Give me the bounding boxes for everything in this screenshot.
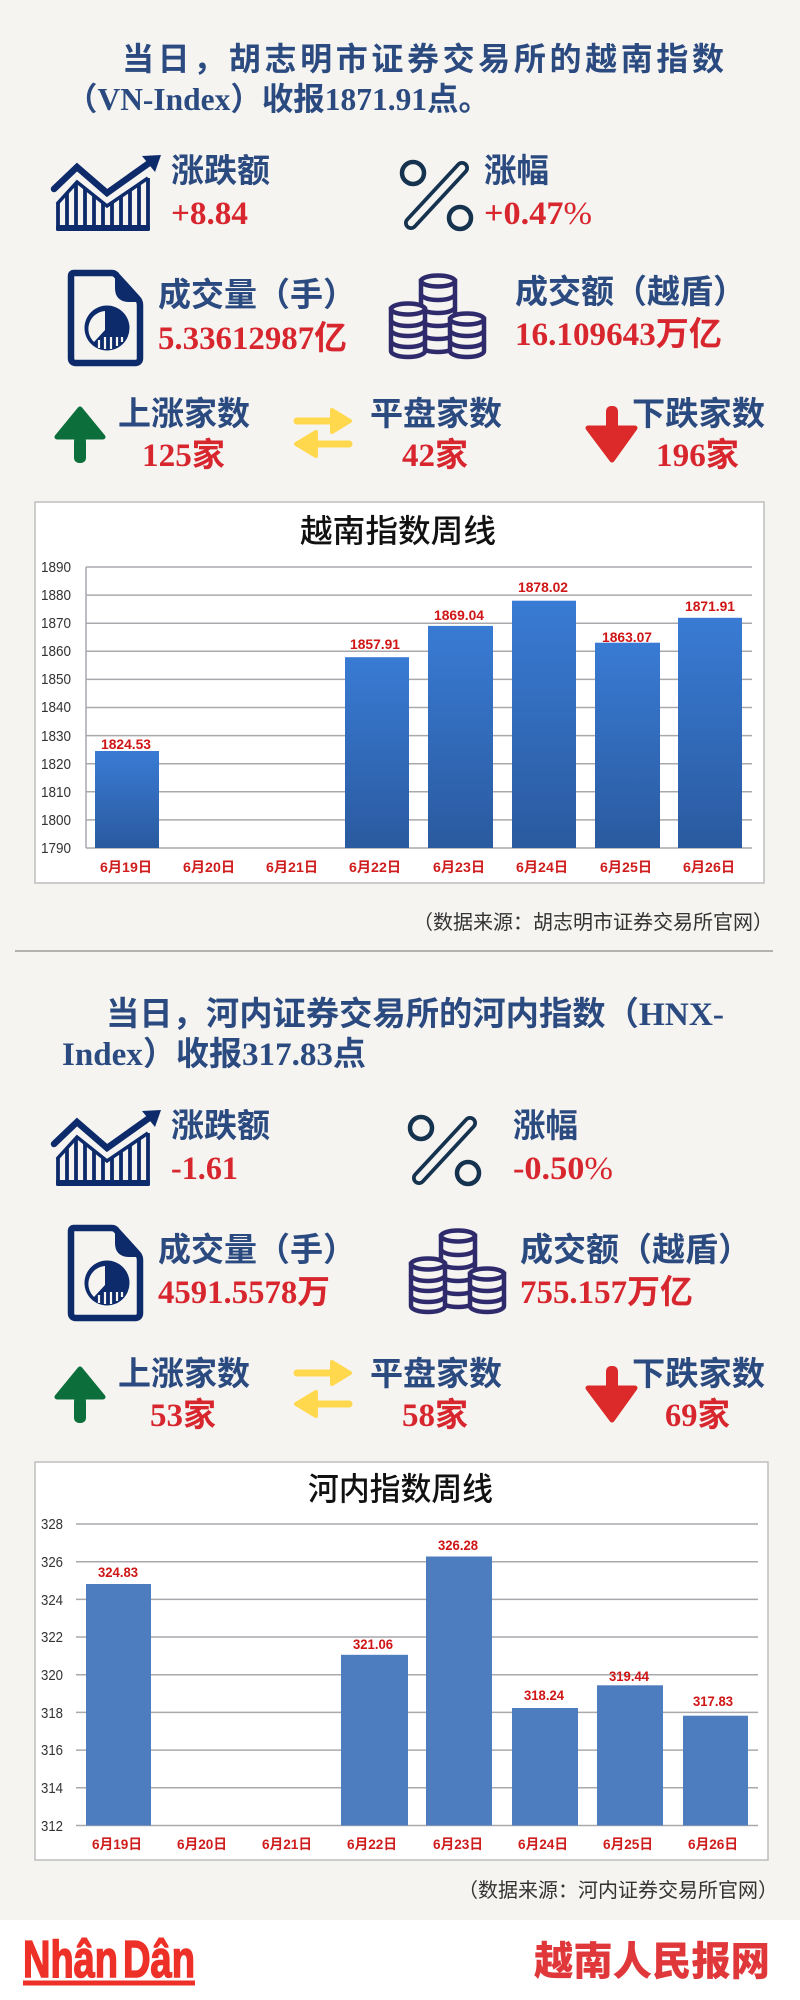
- metric: change percent: [484, 144, 592, 232]
- bar value labels: 318.24: [524, 1687, 564, 1703]
- heading: HNX-Index: [62, 996, 724, 1073]
- logo: Nhan Dan: Dân: [123, 1931, 195, 1989]
- metric: volume: 成交量（手）: [158, 1223, 356, 1271]
- date axis labels: [100, 859, 735, 875]
- date axis labels: 6月24日: [516, 859, 568, 875]
- panel: VN-Index summary: [54, 41, 765, 474]
- panel: HNX-Index weekly bar chart: [35, 1462, 768, 1860]
- metric: decliners: 196家: [656, 437, 739, 474]
- date axis labels: 6月22日: [347, 1836, 397, 1852]
- icon: unchanged arrows: [296, 410, 350, 456]
- metric: change percent: 涨幅: [484, 144, 549, 192]
- date axis labels: 6月25日: [603, 1836, 653, 1852]
- grid lines and axis labels: 1890: [41, 559, 71, 576]
- icon: down arrow: [588, 1366, 635, 1420]
- bar value labels: 324.83: [98, 1564, 138, 1580]
- footer: [0, 1920, 800, 2000]
- bar value labels: 1857.91: [350, 636, 400, 652]
- date axis labels: 6月26日: [688, 1836, 738, 1852]
- bar value labels: 1878.02: [518, 579, 568, 595]
- metric: unchanged: 平盘家数: [370, 1347, 502, 1395]
- grid lines and axis labels: 318: [41, 1705, 63, 1722]
- metric: gainers: [118, 387, 250, 474]
- icon: rising chart: [54, 155, 161, 231]
- bar value labels: 1863.07: [602, 629, 652, 645]
- date axis labels: 6月25日: [600, 859, 652, 875]
- metric: volume: [158, 268, 356, 357]
- bars: [86, 1556, 748, 1826]
- metric: volume: [158, 1223, 356, 1311]
- site name: 越南人民报网: [534, 1929, 770, 1987]
- grid lines and axis labels: [41, 1516, 758, 1835]
- bar value labels: [101, 579, 735, 752]
- metric: turnover: [520, 1223, 751, 1311]
- source note: HNX: （数据来源：河内证券交易所官网）: [458, 1874, 778, 1903]
- grid lines and axis labels: 312: [41, 1818, 63, 1835]
- icon: up arrow: [57, 1369, 103, 1423]
- metric: gainers: 125家: [142, 437, 225, 474]
- bars: [95, 601, 742, 848]
- metric: decliners: 69家: [665, 1397, 730, 1434]
- icon: rising chart: [54, 1110, 161, 1186]
- metric: turnover: 755.157万亿: [520, 1274, 693, 1311]
- icon: down arrow: [588, 406, 635, 460]
- metric: turnover: 16.109643万亿: [515, 316, 722, 353]
- icon: document with pie chart: [71, 272, 143, 363]
- date axis labels: 6月22日: [349, 859, 401, 875]
- chart title: 越南指数周线: [300, 506, 496, 552]
- icon: unchanged arrows: [296, 1362, 350, 1416]
- bar value labels: 321.06: [353, 1636, 393, 1652]
- metric: volume: 5.33612987亿: [158, 320, 347, 357]
- date axis labels: 6月23日: [433, 1836, 483, 1852]
- heading: HNX-Index: 当日，河内证券交易所的河内指数（HNX-: [106, 996, 724, 1033]
- grid lines and axis labels: 324: [41, 1592, 63, 1609]
- metric: volume: 成交量（手）: [158, 268, 356, 316]
- date axis labels: 6月21日: [262, 1836, 312, 1852]
- panel: VN-Index weekly bar chart: [35, 502, 764, 883]
- metric: decliners: [632, 1347, 765, 1434]
- date axis labels: 6月24日: [518, 1836, 568, 1852]
- grid lines and axis labels: [41, 559, 752, 857]
- grid lines and axis labels: 328: [41, 1516, 63, 1533]
- metric: gainers: 上涨家数: [118, 1347, 250, 1395]
- bar value labels: 319.44: [609, 1668, 649, 1684]
- metric: change percent: [513, 1099, 613, 1187]
- date axis labels: 6月20日: [177, 1836, 227, 1852]
- metric: change amount: -1.61: [171, 1151, 238, 1187]
- metric: change percent: 涨幅: [513, 1099, 578, 1147]
- panel: HNX-Index summary: [54, 996, 765, 1434]
- chart title: 河内指数周线: [308, 1464, 493, 1510]
- grid lines and axis labels: 322: [41, 1629, 63, 1646]
- grid lines and axis labels: 1820: [41, 756, 71, 773]
- date axis labels: 6月20日: [183, 859, 235, 875]
- bar value labels: [98, 1537, 733, 1709]
- bar value labels: 1871.91: [685, 598, 735, 614]
- heading: HNX-Index: Index）收报317.83点: [62, 1036, 366, 1073]
- metric: change amount: [171, 1099, 270, 1187]
- metric: change amount: +8.84: [171, 196, 248, 232]
- metric: unchanged: [370, 1347, 502, 1434]
- metric: gainers: [118, 1347, 250, 1434]
- grid lines and axis labels: 1800: [41, 812, 71, 829]
- metric: change percent: +0.47%: [484, 196, 592, 232]
- grid lines and axis labels: 1880: [41, 587, 71, 604]
- heading: VN-Index: 当日，胡志明市证券交易所的越南指数: [122, 41, 724, 77]
- metric: change amount: 涨跌额: [171, 1099, 270, 1147]
- grid lines and axis labels: 316: [41, 1742, 63, 1759]
- grid lines and axis labels: 1810: [41, 784, 71, 801]
- grid lines and axis labels: 314: [41, 1780, 63, 1797]
- metric: gainers: 53家: [150, 1397, 216, 1434]
- metric: decliners: [632, 387, 765, 474]
- metric: decliners: 下跌家数: [632, 1347, 765, 1395]
- date axis labels: 6月19日: [92, 1836, 142, 1852]
- metric: unchanged: 平盘家数: [370, 387, 502, 435]
- metric: turnover: [515, 265, 746, 353]
- metric: gainers: 上涨家数: [118, 387, 250, 435]
- icon: percent: [402, 162, 471, 229]
- date axis labels: 6月21日: [266, 859, 318, 875]
- metric: turnover: 成交额（越盾）: [520, 1223, 751, 1271]
- date axis labels: 6月26日: [683, 859, 735, 875]
- grid lines and axis labels: 1830: [41, 728, 71, 745]
- heading: VN-Index: （VN-Index）收报1871.91点。: [66, 81, 490, 117]
- grid lines and axis labels: 1840: [41, 699, 71, 716]
- icon: document with pie chart: [71, 1227, 143, 1318]
- bar value labels: 326.28: [438, 1537, 478, 1553]
- metric: unchanged: 58家: [402, 1397, 468, 1434]
- grid lines and axis labels: 320: [41, 1667, 63, 1684]
- metric: change amount: [171, 144, 270, 232]
- metric: unchanged: 42家: [402, 437, 468, 474]
- bar value labels: 1824.53: [101, 736, 151, 752]
- logo: Nhan Dan: Nhân: [23, 1931, 118, 1989]
- icon: coins: [411, 1230, 504, 1312]
- grid lines and axis labels: 1860: [41, 643, 71, 660]
- metric: turnover: 成交额（越盾）: [515, 265, 746, 313]
- heading: VN-Index: [66, 41, 724, 117]
- source note: HOSE: （数据来源：胡志明市证券交易所官网）: [413, 906, 773, 935]
- icon: up arrow: [57, 409, 103, 463]
- date axis labels: 6月23日: [433, 859, 485, 875]
- metric: change percent: -0.50%: [513, 1151, 613, 1187]
- date axis labels: 6月19日: [100, 859, 152, 875]
- metric: unchanged: [370, 387, 502, 474]
- grid lines and axis labels: 1870: [41, 615, 71, 632]
- date axis labels: [92, 1836, 738, 1852]
- grid lines and axis labels: 1790: [41, 840, 71, 857]
- icon: coins: [391, 276, 484, 357]
- grid lines and axis labels: 326: [41, 1554, 63, 1571]
- metric: decliners: 下跌家数: [632, 387, 765, 435]
- metric: change amount: 涨跌额: [171, 144, 270, 192]
- metric: volume: 4591.5578万: [158, 1275, 330, 1311]
- bar value labels: 1869.04: [434, 607, 484, 623]
- grid lines and axis labels: 1850: [41, 671, 71, 688]
- icon: percent: [410, 1117, 479, 1184]
- bar value labels: 317.83: [693, 1693, 733, 1709]
